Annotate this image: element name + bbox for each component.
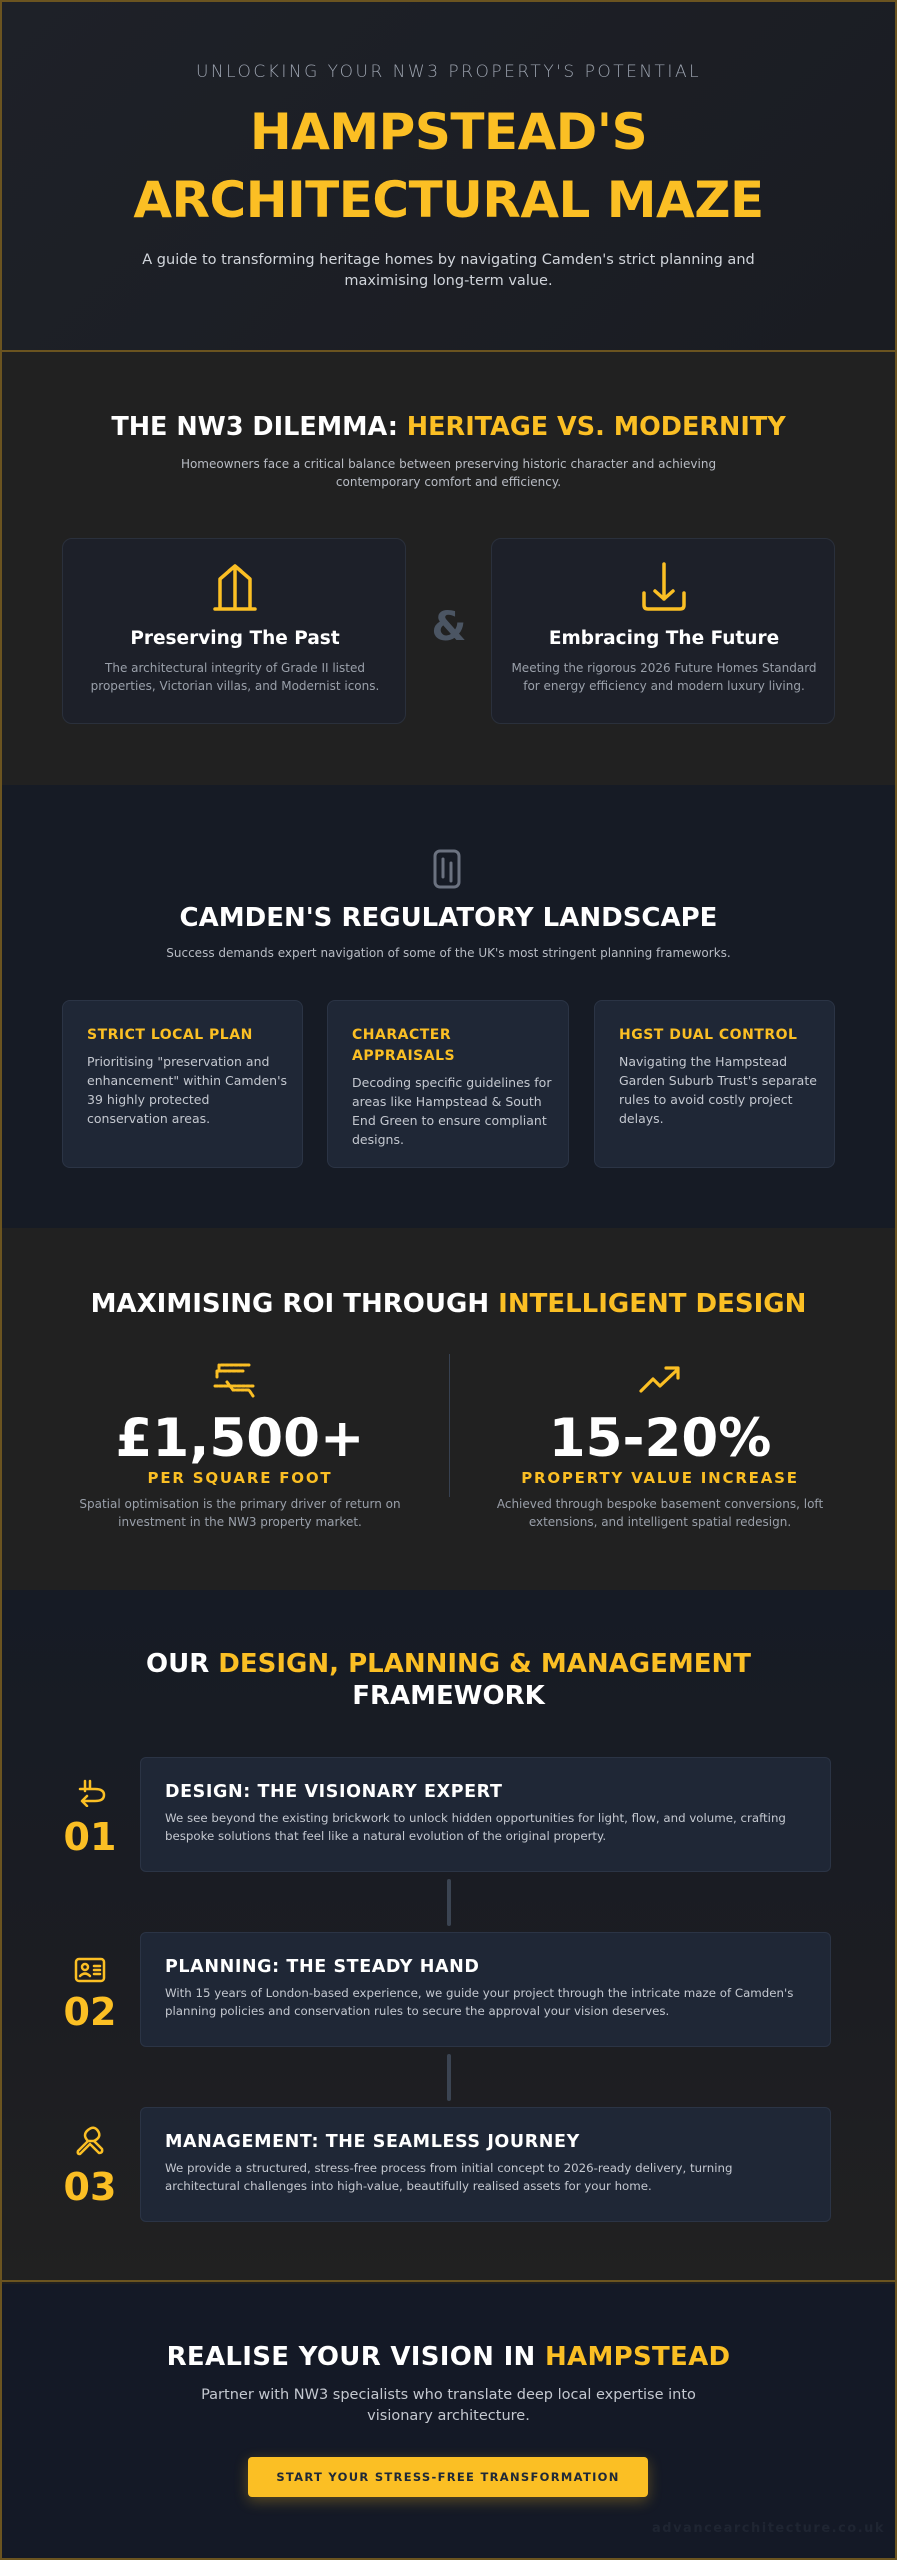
section: framework	[0, 1590, 897, 2282]
stat description	[79, 1497, 401, 1529]
card: embracing the future	[491, 538, 835, 724]
dilemma intro: Homeowners face a critical balance between preserving historic character and achieving	[181, 457, 716, 471]
card text	[91, 661, 379, 693]
cta text: visionary architecture.	[367, 2408, 530, 2424]
card: hgst dual control: Navigating the Hampstead Garden Suburb Trust's separate rules to avoid costly project delays.	[619, 1054, 817, 1126]
icon: blueprint lines	[214, 1364, 255, 1398]
card: planning: PLANNING: THE STEADY HAND	[165, 1957, 479, 1977]
card text: Meeting the rigorous 2026 Future Homes Standard	[511, 661, 817, 675]
cta text: Partner with NW3 specialists who translate deep local expertise into	[201, 2387, 696, 2403]
card: strict local plan: STRICT LOCAL PLAN	[87, 1027, 253, 1043]
section: regulatory landscape	[0, 785, 897, 1228]
card: design: DESIGN: THE VISIONARY EXPERT	[165, 1782, 502, 1802]
watermark: advancearchitecture.co.uk	[652, 2521, 885, 2536]
step 3	[64, 2107, 831, 2222]
hero description	[142, 252, 755, 289]
dilemma intro	[181, 457, 716, 489]
card: character appraisals: CHARACTER	[352, 1027, 451, 1043]
ampersand: &	[432, 604, 466, 650]
framework heading: OUR DESIGN, PLANNING & MANAGEMENT	[146, 1649, 751, 1679]
roi heading: MAXIMISING ROI THROUGH INTELLIGENT DESIGN	[91, 1289, 806, 1319]
stat description	[497, 1497, 823, 1529]
icon: tools	[76, 2126, 104, 2156]
stat description: extensions, and intelligent spatial redesign.	[529, 1515, 791, 1529]
card text	[511, 661, 817, 693]
card: character appraisals: APPRAISALS	[352, 1048, 455, 1064]
card text: for energy efficiency and modern luxury living.	[523, 679, 805, 693]
big number: £1,500+	[116, 1408, 364, 1469]
connector	[447, 1879, 451, 1926]
step 2	[64, 1932, 831, 2047]
card: hgst dual control: HGST DUAL CONTROL	[619, 1027, 797, 1043]
dilemma heading: THE NW3 DILEMMA: HERITAGE VS. MODERNITY	[111, 412, 786, 442]
framework heading	[146, 1649, 751, 1711]
card: preserving the past	[62, 538, 406, 724]
card: strict local plan: enhancement" within Camden's	[87, 1073, 287, 1088]
card: management	[140, 2107, 831, 2222]
cta text	[201, 2387, 696, 2424]
section: hero	[0, 0, 897, 352]
regulatory heading: CAMDEN'S REGULATORY LANDSCAPE	[180, 903, 717, 933]
section: roi	[0, 1228, 897, 1590]
card: strict local plan	[62, 1000, 303, 1168]
step 1	[64, 1757, 831, 1872]
section: dilemma	[0, 352, 897, 785]
card title: Embracing The Future	[549, 628, 779, 649]
regulatory intro: Success demands expert navigation of some of the UK's most stringent planning frameworks.	[166, 946, 731, 960]
card: management: We provide a structured, stress-free process from initial concept to 2026-ready delivery, turning architectural challenges into high-value, beautifully realised assets for your home.	[165, 2161, 732, 2193]
icon: document	[434, 850, 460, 888]
big number: 15-20%	[549, 1408, 771, 1469]
stat: value increase	[497, 1366, 823, 1529]
card text: The architectural integrity of Grade II listed	[105, 661, 365, 675]
card: management: MANAGEMENT: THE SEAMLESS JOURNEY	[165, 2132, 580, 2152]
section: cta	[0, 2284, 897, 2560]
card text: properties, Victorian villas, and Modernist icons.	[91, 679, 379, 693]
number 03: 03	[64, 2165, 116, 2209]
connector	[447, 2054, 451, 2101]
cta button: START YOUR STRESS-FREE TRANSFORMATION	[276, 2470, 620, 2484]
hero description: maximising long-term value.	[344, 273, 553, 289]
icon: id card	[74, 1958, 106, 1982]
hero description: A guide to transforming heritage homes by navigating Camden's strict planning and	[142, 252, 755, 268]
hero kicker: UNLOCKING YOUR NW3 PROPERTY'S POTENTIAL	[196, 62, 701, 82]
icon: design	[78, 1780, 106, 1807]
stat label: PER SQUARE FOOT	[148, 1469, 332, 1487]
card title: Preserving The Past	[130, 628, 340, 649]
hero title	[133, 103, 764, 229]
card: character appraisals	[327, 1000, 569, 1168]
icon: trending up	[639, 1366, 680, 1393]
hero title: ARCHITECTURAL MAZE	[133, 171, 764, 229]
card: design	[140, 1757, 831, 1872]
card: hgst dual control	[594, 1000, 835, 1168]
stat description: investment in the NW3 property market.	[118, 1515, 362, 1529]
stat description: Spatial optimisation is the primary driver of return on	[79, 1497, 401, 1511]
cta heading: REALISE YOUR VISION IN HAMPSTEAD	[167, 2342, 730, 2372]
stat: price per sq ft	[79, 1364, 401, 1529]
dilemma intro: contemporary comfort and efficiency.	[336, 475, 561, 489]
card: character appraisals: Decoding specific guidelines for areas like Hampstead & South End Green to ensure compliant designs.	[352, 1075, 551, 1147]
framework heading: FRAMEWORK	[352, 1681, 545, 1711]
card: design: We see beyond the existing brickwork to unlock hidden opportunities for light, flow, and volume, crafting bespoke solutions that feel like a natural evolution of the original property.	[165, 1811, 786, 1843]
number 01: 01	[64, 1815, 116, 1859]
card: strict local plan: conservation areas.	[87, 1111, 210, 1126]
hero title: HAMPSTEAD'S	[250, 103, 647, 161]
card: strict local plan: 39 highly protected	[87, 1092, 209, 1107]
divider	[449, 1354, 450, 1497]
card: planning: With 15 years of London-based experience, we guide your project through the intricate maze of Camden's planning policies and conservation rules to secure the approval your vision deserves.	[165, 1986, 793, 2018]
icon: heritage building	[213, 564, 257, 611]
number 02: 02	[64, 1990, 116, 2034]
card: strict local plan: Prioritising "preservation and	[87, 1054, 269, 1069]
stat description: Achieved through bespoke basement conversions, loft	[497, 1497, 823, 1511]
icon: download arrow	[642, 562, 686, 611]
stat label: PROPERTY VALUE INCREASE	[521, 1469, 799, 1487]
card: planning	[140, 1932, 831, 2047]
cta button	[248, 2457, 648, 2497]
